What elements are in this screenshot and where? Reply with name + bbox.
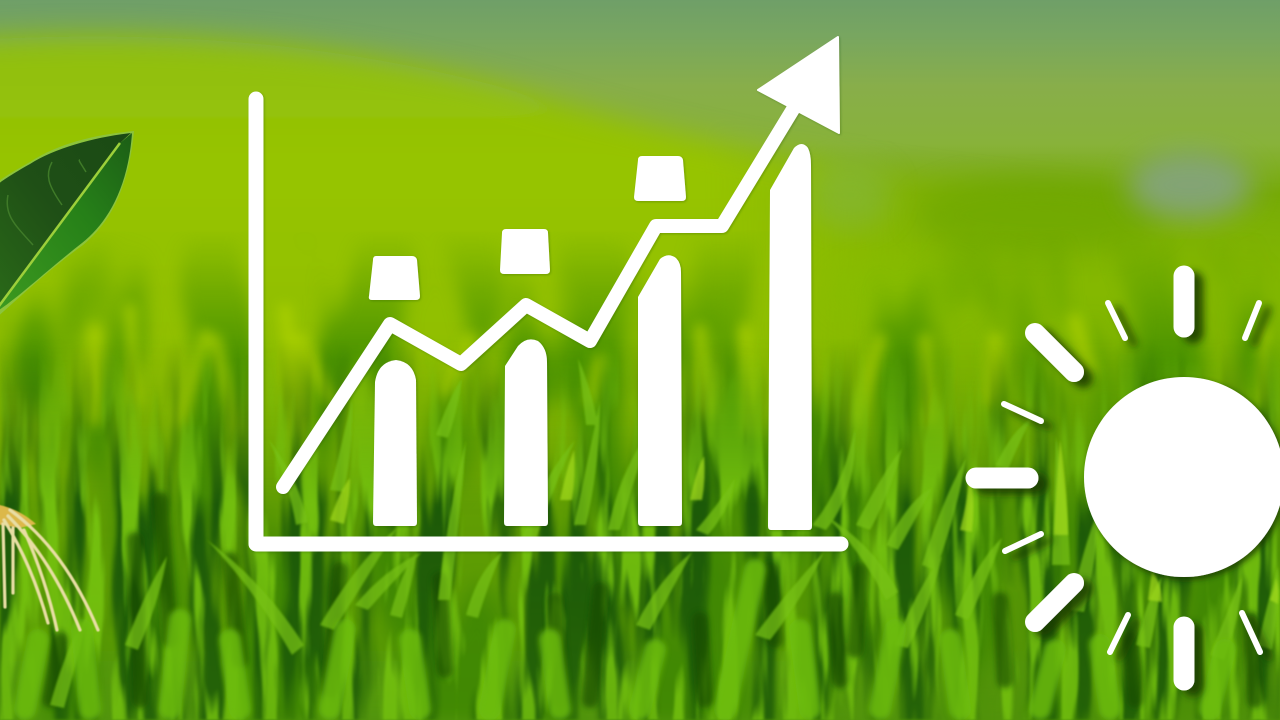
marker 1 [369,256,420,300]
bar 4 [768,144,812,530]
background: grass texture [0,347,1280,720]
background: soft out-of-focus grass [0,244,1280,720]
arrow head [758,37,839,133]
bar 2 [504,339,548,526]
background: bright sunlit blades [330,440,1279,604]
background: near grass, soft foreground [25,570,1225,709]
chart axes [256,99,841,544]
background: mid grass blades [50,358,1278,708]
chart: growth chart icon [256,37,841,544]
bar 1 [373,360,417,526]
icon: leaf [0,131,134,318]
icon: plant roots [0,504,98,630]
trend line [283,106,795,487]
sun disc [1084,377,1280,577]
marker 2 [500,229,550,274]
bar 3 [638,255,682,526]
icon: sun [976,276,1280,680]
background: dark gaps between blades [50,500,1255,700]
sun rays [976,276,1260,680]
marker 3 [634,156,686,201]
